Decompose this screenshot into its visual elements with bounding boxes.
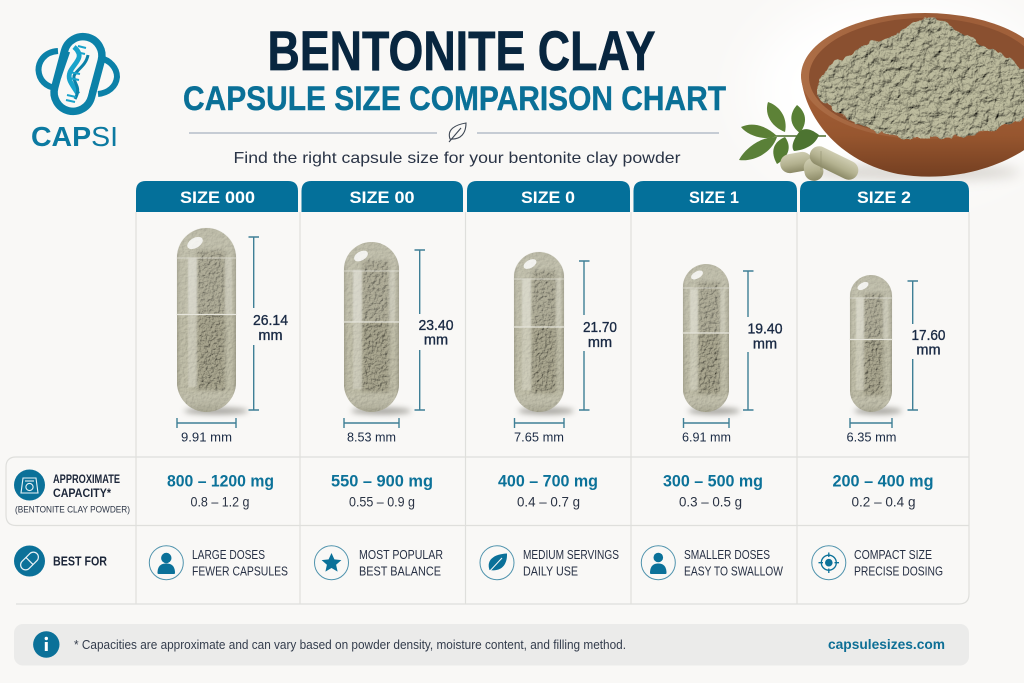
best for: size 1: SMALLER DOSES	[684, 548, 770, 562]
dimension: 21.70 mm length: 21.70	[583, 320, 617, 336]
dimension: 23.40 mm length	[414, 250, 454, 410]
best for: size 1: EASY TO SWALLOW	[684, 564, 783, 578]
capacity values: size 1	[663, 472, 763, 510]
dimension: 23.40 mm length: mm	[424, 332, 448, 348]
best for: size 00	[314, 546, 443, 580]
best for: size 000: FEWER CAPSULES	[192, 564, 288, 578]
capacity values: size 000: 0.8 – 1.2 g	[190, 494, 250, 510]
title: BENTONITE CLAY	[268, 19, 656, 82]
capacity values: size 000: 800 – 1200 mg	[167, 472, 274, 490]
capacity values: size 1: 0.3 – 0.5 g	[679, 494, 742, 510]
best for: size 000: LARGE DOSES	[192, 548, 265, 562]
bowl rim	[801, 13, 1024, 139]
capsule: size 1	[682, 264, 740, 414]
icon: leaf	[480, 546, 514, 580]
header: size 0	[467, 181, 630, 212]
clay powder mound	[816, 16, 1024, 138]
dimension: 23.40 mm length: 23.40	[418, 318, 454, 334]
icon: capsule	[14, 546, 45, 576]
capacity values: size 0: 0.4 – 0.7 g	[517, 494, 580, 510]
capacity values: size 00	[331, 472, 433, 510]
dimension: 7.65 mm width	[514, 418, 564, 444]
header: size 1: SIZE 1	[689, 188, 739, 207]
dimension: 19.40 mm length: mm	[753, 336, 777, 352]
dimension: 26.14 mm length: mm	[258, 328, 283, 344]
dimension: 26.14 mm length	[248, 237, 288, 410]
bowl body	[801, 74, 1024, 177]
website: capsulesizes.com	[828, 637, 945, 652]
header: size 1	[634, 181, 797, 212]
capacity values: size 000	[167, 472, 274, 510]
row label: best for	[14, 546, 107, 576]
row label: approximate capacity	[14, 470, 130, 514]
tagline: Find the right capsule size for your bentonite clay powder	[234, 150, 681, 167]
capacity values: size 2	[832, 472, 934, 510]
footer note bar	[14, 624, 969, 666]
dimension: 17.60 mm length	[908, 281, 946, 410]
icon: star	[314, 546, 348, 580]
best for: size 0: DAILY USE	[523, 564, 578, 578]
dimension: 8.53 mm width: 8.53 mm	[347, 430, 396, 444]
capacity values: size 0	[498, 472, 598, 510]
dimension: 21.70 mm length	[579, 261, 617, 410]
dimension: 17.60 mm length: 17.60	[912, 328, 946, 344]
icon: kitchen scale	[14, 470, 45, 500]
icon: divider leaf	[449, 123, 466, 142]
icon: target	[812, 546, 846, 580]
dimension: 8.53 mm width	[344, 418, 399, 444]
dimension: 21.70 mm length: mm	[588, 335, 612, 351]
dimension: 6.35 mm width	[846, 418, 896, 444]
small capsules	[779, 143, 862, 183]
best for: size 00: BEST BALANCE	[359, 564, 441, 578]
icon: info	[33, 631, 60, 658]
dimension: 26.14 mm length: 26.14	[253, 313, 288, 329]
bowl of bentonite clay powder	[801, 13, 1024, 181]
leaves sprig	[739, 102, 826, 164]
dimension: 6.91 mm width: 6.91 mm	[682, 430, 731, 444]
dimension: 19.40 mm length: 19.40	[748, 322, 782, 338]
best for: size 0	[480, 546, 619, 580]
row label: approximate capacity: APPROXIMATE	[53, 472, 120, 486]
capacity values: size 1: 300 – 500 mg	[663, 472, 763, 490]
best for: size 1	[641, 546, 783, 580]
header: size 0: SIZE 0	[521, 188, 575, 207]
best for: size 00: MOST POPULAR	[359, 548, 443, 562]
size headers	[136, 181, 969, 212]
dimension: 6.91 mm width	[682, 418, 731, 444]
capacity values: size 00: 550 – 900 mg	[331, 472, 433, 490]
capacity values: size 0: 400 – 700 mg	[498, 472, 598, 490]
dimension: 17.60 mm length: mm	[916, 342, 941, 358]
capsule: size 000	[176, 228, 248, 414]
icon: person	[641, 546, 675, 580]
header: size 000: SIZE 000	[180, 188, 255, 207]
dimension: 9.91 mm width: 9.91 mm	[181, 430, 232, 444]
capsule: size 2	[850, 275, 902, 414]
logo mark	[38, 32, 117, 116]
best for: size 2: COMPACT SIZE	[854, 548, 932, 562]
icon: person	[149, 546, 183, 580]
subtitle: CAPSULE SIZE COMPARISON CHART	[183, 80, 726, 118]
header: size 2: SIZE 2	[857, 188, 911, 207]
footnote: * Capacities are approximate and can vary based on powder density, moisture content, and filling method.	[74, 638, 626, 652]
best for: size 2: PRECISE DOSING	[854, 564, 943, 578]
capacity values: size 00: 0.55 – 0.9 g	[349, 494, 415, 510]
capacity values: size 2: 0.2 – 0.4 g	[852, 494, 916, 510]
dimension: 19.40 mm length	[743, 271, 782, 410]
row label: approximate capacity: (BENTONITE CLAY POWDER)	[15, 504, 130, 514]
header: size 00	[302, 181, 463, 212]
capsule: size 0	[514, 252, 574, 414]
header: size 2	[800, 181, 969, 212]
capacity values: size 2: 200 – 400 mg	[832, 472, 934, 490]
header: size 00: SIZE 00	[350, 188, 414, 207]
comparison table	[6, 212, 969, 604]
dimension: 6.35 mm width: 6.35 mm	[846, 430, 896, 444]
dimension: 9.91 mm width	[177, 418, 236, 444]
best for: size 2	[812, 546, 943, 580]
best for: size 000	[149, 546, 288, 580]
row label: approximate capacity: CAPACITY*	[53, 486, 111, 500]
capsule: size 00	[344, 242, 411, 414]
logo wordmark: CAPSI	[31, 121, 118, 152]
header: size 000	[136, 181, 298, 212]
best for: size 0: MEDIUM SERVINGS	[523, 548, 619, 562]
row label: best for: BEST FOR	[53, 554, 107, 568]
dimension: 7.65 mm width: 7.65 mm	[514, 430, 564, 444]
logo: CAPSI	[31, 32, 118, 152]
